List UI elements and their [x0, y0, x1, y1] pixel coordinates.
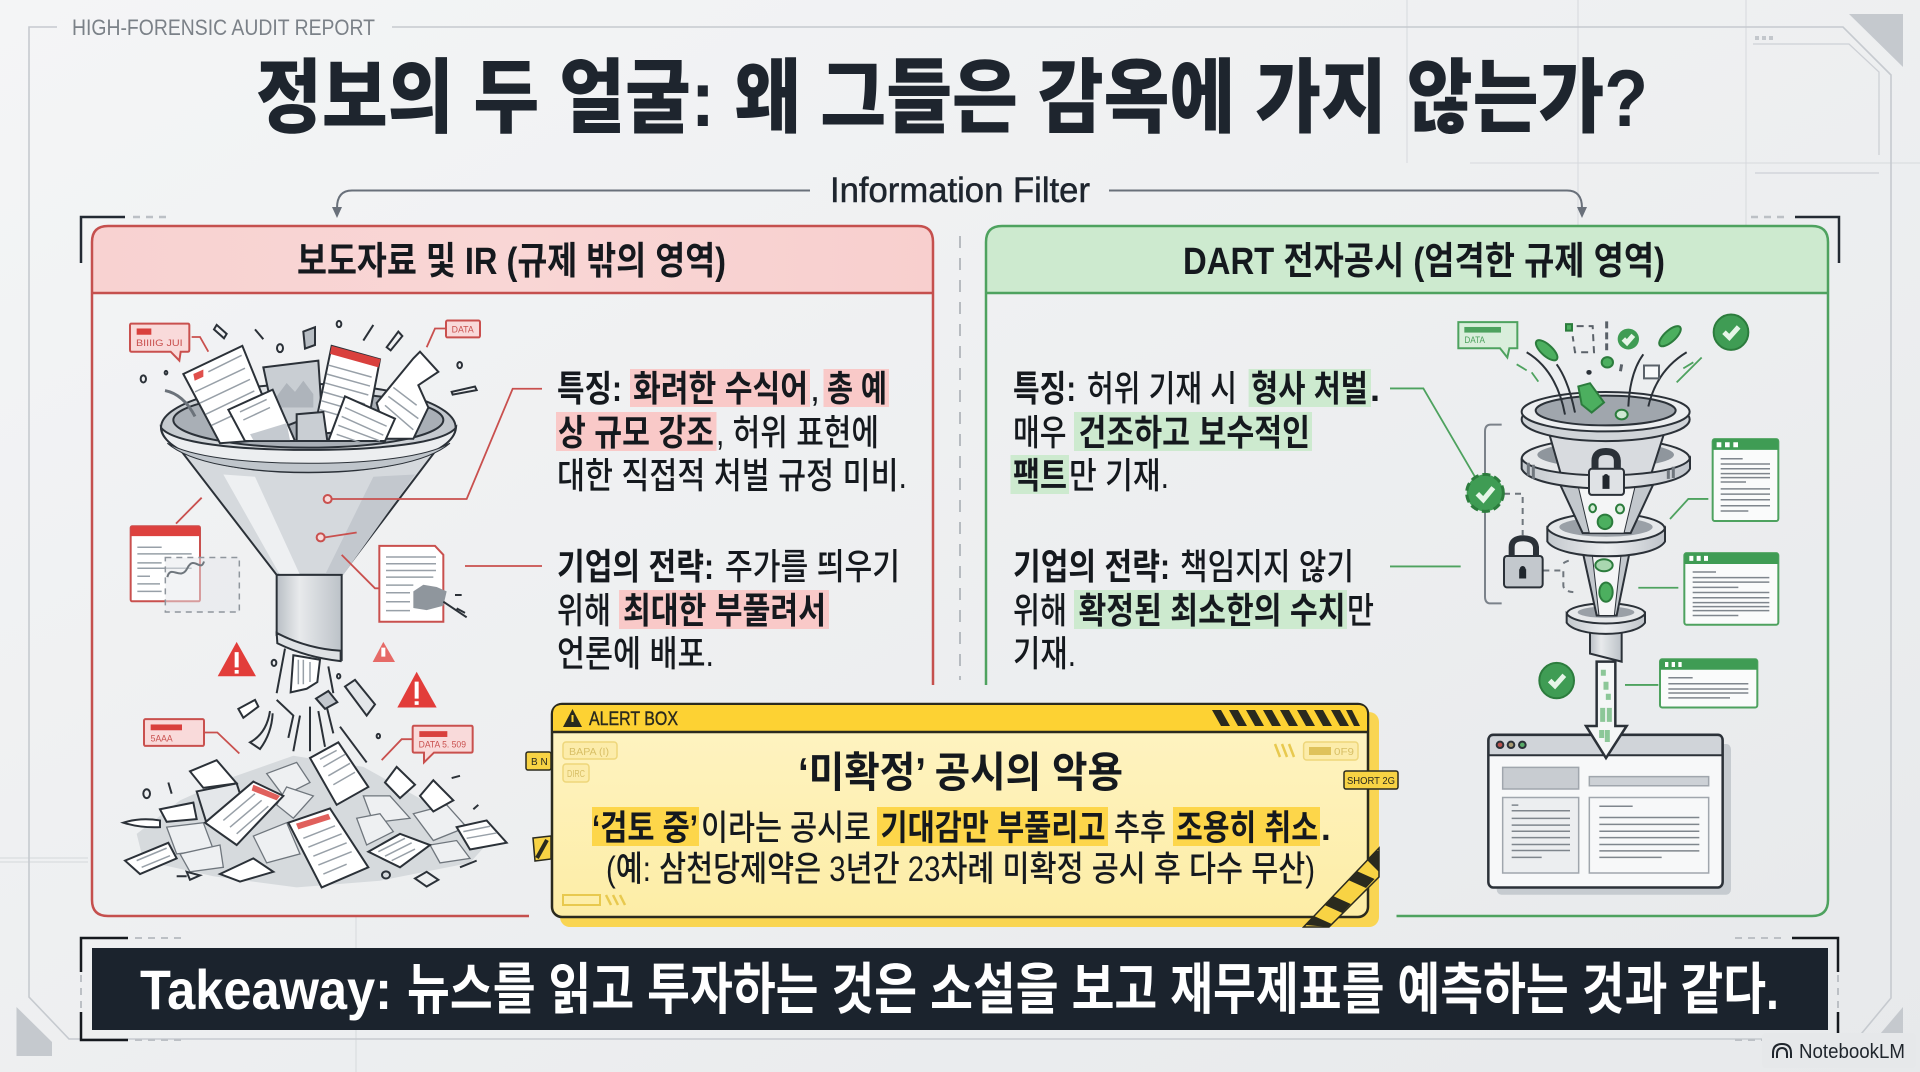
NotebookLM badge: NotebookLM: [1799, 1041, 1905, 1063]
information filter split arrows: Information Filter: [830, 171, 1090, 210]
text block: press release traits: 대한 직접적 처벌 규정 미비.: [557, 455, 907, 496]
funnel rim front: [161, 428, 456, 472]
window document with dashed overlay: [131, 498, 239, 612]
small data tags: BAPA (I): [569, 747, 609, 758]
alert label: ALERT BOX: [589, 709, 678, 730]
tag callouts: DATA: [452, 325, 475, 335]
takeaway banner: Takeaway:: [140, 958, 392, 1021]
verified check badges: [1467, 315, 1748, 698]
text block: press release traits: , 허위 표현에: [716, 412, 879, 453]
hazard tape: [1304, 848, 1379, 927]
warning icons: [218, 642, 437, 708]
text block: DART traits: 형사 처벌: [1251, 368, 1368, 409]
torn document: [342, 546, 467, 622]
text block: DART traits: [1010, 368, 1380, 496]
funnel: [161, 384, 456, 661]
illustration: locked funnel and verified report window: [1390, 315, 1778, 895]
hazard stripes: [1212, 710, 1360, 726]
tag callouts: 5AAA: [151, 733, 173, 744]
filter funnel stages: [1522, 392, 1690, 662]
icon: main padlock: [1589, 452, 1624, 495]
alert body text: 조용히 취소: [1176, 809, 1318, 848]
information filter split arrows: [332, 171, 1587, 218]
text block: press release strategy: 최대한 부풀려서: [623, 590, 826, 631]
text block: DART strategy: 만: [1347, 590, 1374, 631]
text block: DART strategy: 기재.: [1013, 633, 1076, 674]
panel: DART disclosure: [986, 226, 1828, 916]
text block: press release traits: 화려한 수식어: [633, 368, 808, 409]
icon: alert triangle: [563, 709, 582, 727]
green data fragments in funnel: [1589, 504, 1624, 602]
funnel callout pins: [317, 389, 542, 566]
alert body text: ‘검토 중’: [592, 809, 698, 848]
text block: press release traits: 총 예: [827, 368, 887, 409]
center dashed divider: [959, 236, 961, 680]
green report cards: [1660, 439, 1778, 707]
text block: DART traits: 매우: [1013, 412, 1066, 453]
flying fragments: [141, 321, 477, 738]
text block: DART strategy: [1013, 546, 1374, 674]
tag callouts: [130, 320, 480, 762]
text block: press release traits: [556, 368, 907, 496]
fragments entering the funnel: [1517, 321, 1702, 419]
text block: press release strategy: 기업의 전략:: [557, 546, 714, 587]
DATA speech tag: DATA: [1464, 334, 1485, 345]
header: press release panel: 보도자료 및 IR (규제 밖의 영역): [297, 241, 726, 283]
NotebookLM badge: [1762, 1033, 1916, 1068]
header: DART panel: [986, 226, 1828, 293]
text block: DART traits: 허위 기재 시: [1087, 368, 1237, 409]
text block: press release traits: ,: [810, 368, 820, 409]
tag callouts: BIIIIG JUI: [136, 338, 183, 348]
text block: press release strategy: 주가를 띄우기: [725, 546, 900, 587]
alert heading: ‘미확정’ 공시의 악용: [798, 749, 1123, 796]
alert body text: 이라는 공시로: [701, 809, 871, 848]
alert box body: [552, 704, 1379, 927]
header: press release panel: [92, 226, 934, 293]
text block: DART strategy: 확정된 최소한의 수치: [1078, 590, 1346, 631]
tag callouts: DATA 5. 509: [419, 740, 466, 750]
callout: alert box: [526, 704, 1398, 927]
text block: DART traits: 만 기재.: [1069, 455, 1169, 496]
text block: DART traits: .: [1370, 368, 1380, 409]
small data tags: SHORT 2G: [1347, 776, 1395, 787]
corner brackets: panels: [81, 217, 1839, 263]
alert body text: 기대감만 부풀리고: [880, 809, 1106, 848]
browser report window: [1488, 735, 1731, 895]
shredded document pile: [123, 742, 507, 887]
alert body text: .: [1321, 809, 1331, 848]
takeaway banner: [92, 948, 1828, 1030]
illustration: leaky funnel with documents: [123, 320, 542, 887]
falling paper stream: [238, 649, 375, 762]
text block: DART traits: 팩트: [1013, 455, 1067, 496]
locked side padlock: [1504, 538, 1543, 587]
alert body text: [592, 807, 1331, 889]
documents entering funnel: [165, 346, 438, 443]
verified arrow: [1586, 662, 1627, 758]
text block: DART traits: 특징:: [1013, 368, 1076, 409]
text block: DART strategy: 책임지지 않기: [1180, 546, 1354, 587]
text block: DART strategy: 기업의 전략:: [1013, 546, 1170, 587]
small data tags: B N: [531, 757, 548, 768]
corner brackets: takeaway: [81, 938, 1838, 1040]
title: 정보의 두 얼굴: 왜 그들은 감옥에 가지 않는가?: [256, 54, 1648, 144]
text block: press release traits: 특징:: [557, 368, 622, 409]
alert body text: (예: 삼천당제약은 3년간 23차례 미확정 공시 후 다수 무산): [606, 850, 1315, 889]
text block: press release strategy: 언론에 배포.: [557, 633, 714, 674]
text block: press release traits: 상 규모 강조: [558, 412, 714, 453]
text block: press release strategy: [557, 546, 900, 674]
text block: DART traits: 건조하고 보수적인: [1078, 412, 1310, 453]
alert body text: 추후: [1114, 809, 1166, 848]
small data tags: DIRC: [567, 769, 585, 780]
callout connectors: [1390, 388, 1708, 685]
DATA speech tag: [1458, 322, 1517, 358]
small data tags: 0F9: [1334, 747, 1355, 758]
small data tags: [526, 742, 1398, 905]
text block: press release strategy: 위해: [557, 590, 611, 631]
header: DART panel: DART 전자공시 (엄격한 규제 영역): [1183, 241, 1665, 283]
text block: DART strategy: 위해: [1013, 590, 1067, 631]
panel: press release and IR: [92, 226, 934, 916]
report label: HIGH-FORENSIC AUDIT REPORT: [72, 15, 375, 40]
